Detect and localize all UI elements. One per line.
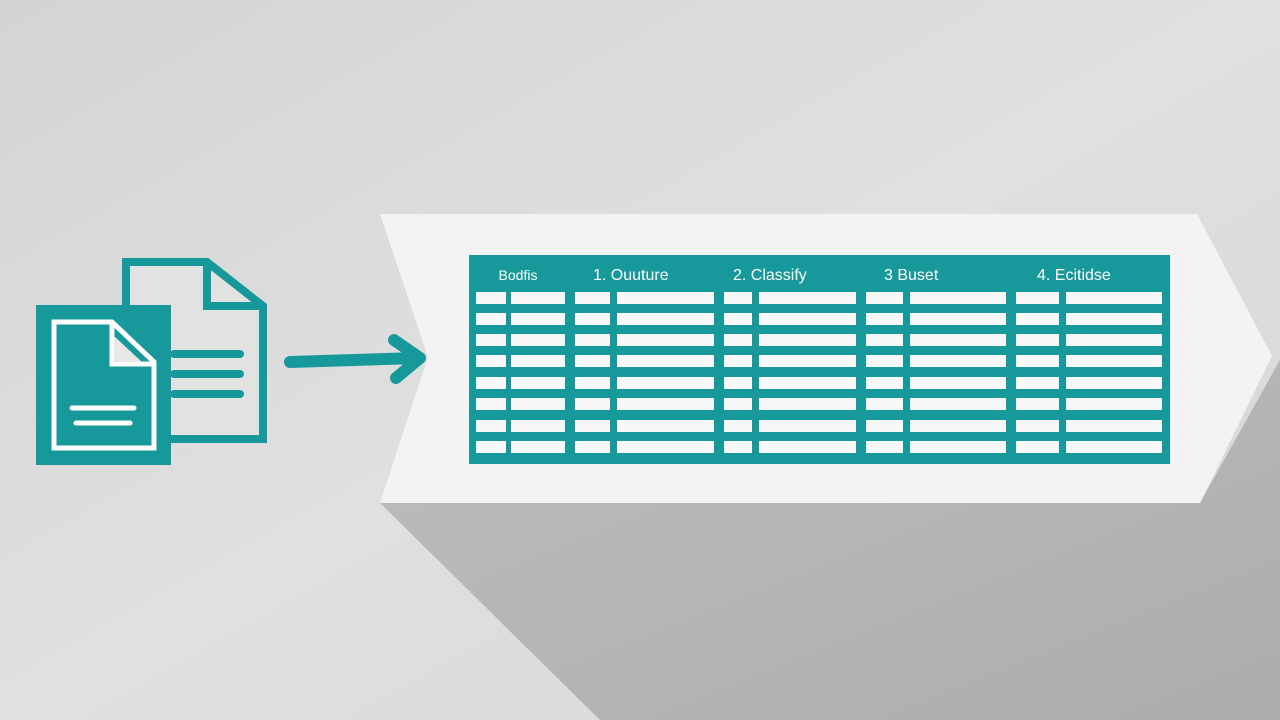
icon: back document bbox=[126, 262, 263, 439]
shadow bbox=[380, 360, 1280, 720]
chevron panel bbox=[380, 214, 1272, 503]
table header: 3 Buset bbox=[884, 267, 939, 284]
table bbox=[469, 255, 1170, 464]
table header bbox=[499, 267, 1111, 284]
table header: 4. Ecitidse bbox=[1037, 267, 1111, 284]
table header: Bodfis bbox=[499, 267, 537, 283]
icon: documents bbox=[36, 262, 263, 465]
table header: 2. Classify bbox=[733, 267, 807, 284]
table header: 1. Ouuture bbox=[593, 267, 669, 284]
arrow bbox=[290, 340, 420, 378]
table rows bbox=[476, 292, 1162, 453]
icon: front document bbox=[36, 305, 171, 465]
